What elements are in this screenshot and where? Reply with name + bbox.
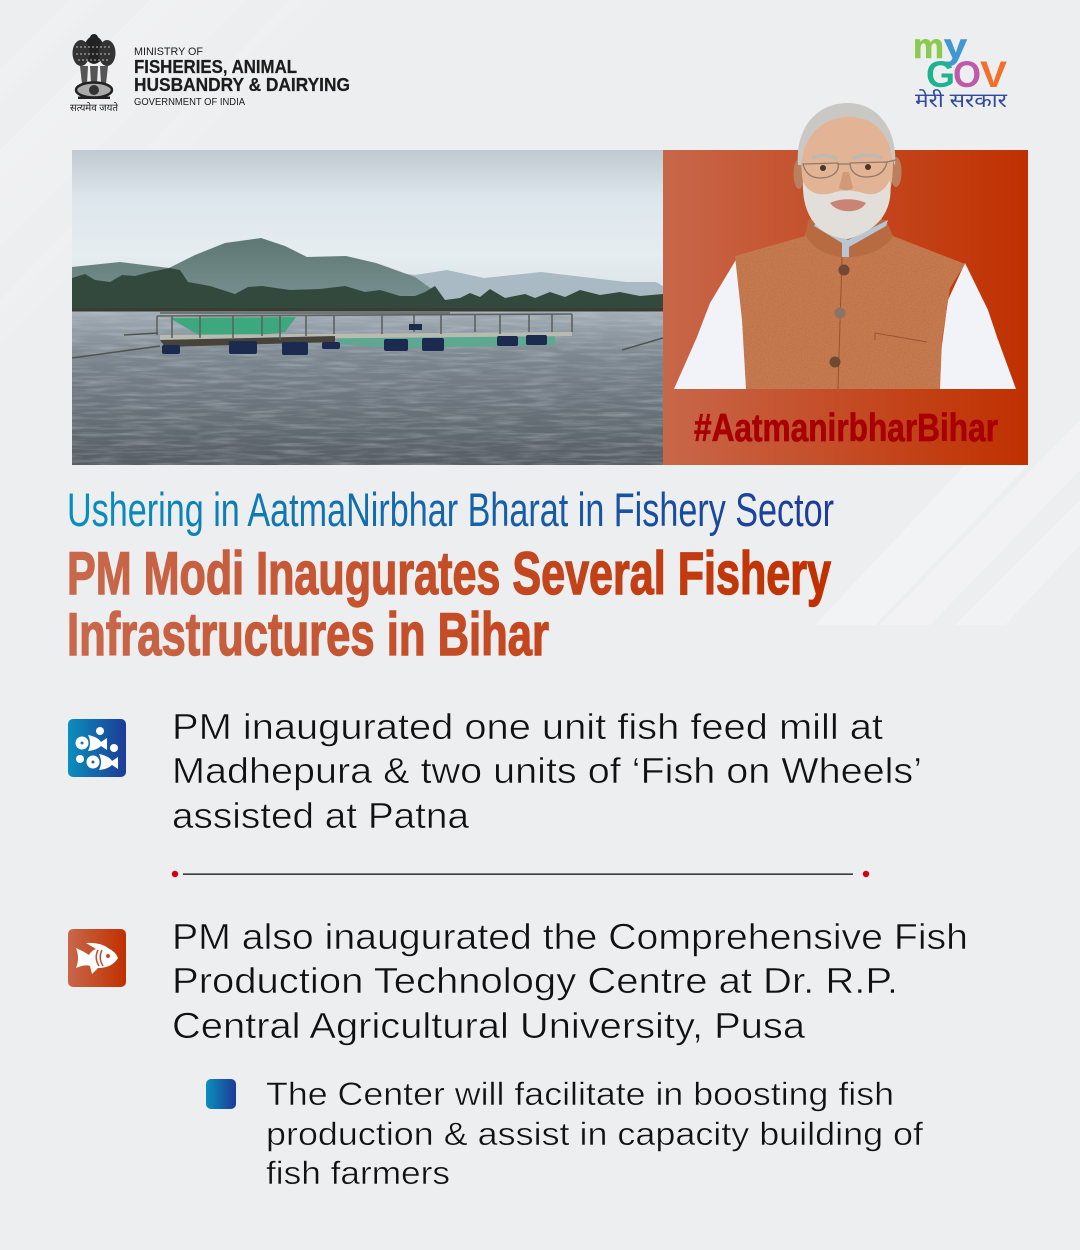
title: Infrastructures in Bihar [67,601,549,668]
buttons [838,264,850,276]
mygov logo: G [926,54,955,95]
text: sub point [266,1076,924,1191]
text: first point: assisted at Patna [172,795,470,836]
ministry name: MINISTRY OF [134,46,203,58]
floating platform [72,313,663,358]
portrait of PM [674,103,1016,389]
mygov logo: मेरी सरकार [915,84,1008,113]
shirt collar [814,220,888,257]
text: first point: PM inaugurated one unit fish feed mill at [172,706,883,747]
text: sub point: fish farmers [266,1155,450,1191]
mygov logo: O [953,54,981,95]
tree line [72,268,663,312]
lake water [72,310,663,465]
sleeves [674,258,1016,389]
mygov logo [913,27,1008,113]
ministry name [134,46,350,108]
icon: fish production [68,929,126,987]
text: first point: Madhepura & two units of ‘Fish on Wheels’ [172,750,922,791]
icon: national emblem [72,34,116,99]
eyebrows [812,155,882,159]
photo: fish cage farm on lake [72,150,663,465]
ministry name: GOVERNMENT OF INDIA [134,96,245,108]
mygov logo: m [913,27,944,66]
mygov logo: y [944,27,968,66]
text: second point: Central Agricultural University, Pusa [172,1005,806,1046]
ministry logo [70,34,350,114]
text: second point [172,916,968,1046]
text: second point: Production Technology Centre at Dr. R.P. [172,960,898,1001]
ears [794,159,804,189]
text: sub point: production & assist in capacity building of [266,1116,924,1152]
text: second point: PM also inaugurated the Comprehensive Fish [172,916,968,957]
beard [803,180,891,239]
face [801,112,893,238]
hashtag: #AatmanirbharBihar [694,407,998,450]
icon: fish feed mill [68,719,126,777]
mygov logo: V [980,54,1007,95]
ministry name: HUSBANDRY & DAIRYING [134,75,350,95]
far mountains [406,270,663,300]
text: sub point: The Center will facilitate in boosting fish [266,1076,894,1112]
panel: hashtag and portrait [663,103,1028,465]
hair [798,103,895,166]
glasses [803,160,896,178]
ministry name: FISHERIES, ANIMAL [134,57,297,77]
title [67,540,831,668]
emblem motto: सत्यमेव जयते [70,99,118,114]
vest [735,224,965,389]
bullet [206,1079,236,1109]
neck [810,205,884,258]
text: first point [172,706,922,836]
